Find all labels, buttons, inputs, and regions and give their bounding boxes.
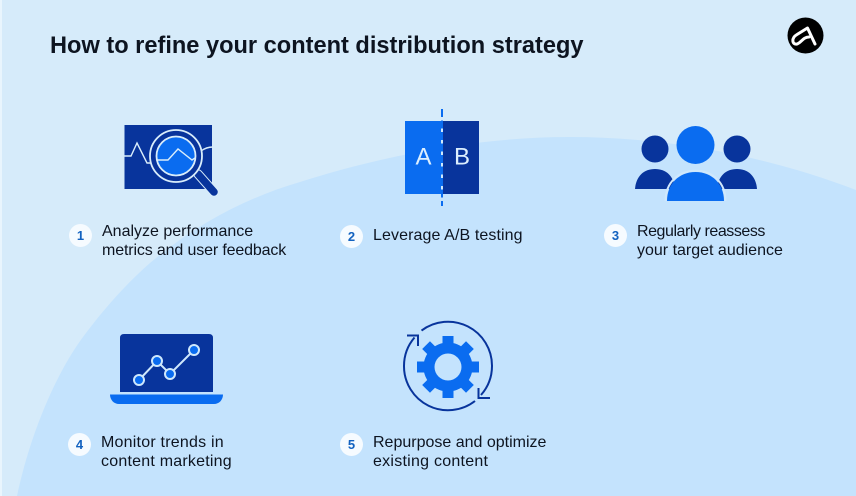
label 3: Regularly reassess xyxy=(637,223,765,240)
number 5 xyxy=(340,433,363,456)
icon: A/B test panels: B xyxy=(454,144,470,170)
icon: chart under magnifying glass xyxy=(124,125,218,196)
number 2 xyxy=(340,225,363,248)
label 5: Repurpose and optimize xyxy=(373,434,546,451)
label 3 xyxy=(637,223,783,259)
icon: A/B test panels xyxy=(405,109,479,206)
label 3: your target audience xyxy=(637,242,783,259)
label 1 xyxy=(102,223,286,259)
icon: brand logo xyxy=(788,18,824,54)
number 1: 1 xyxy=(77,228,84,243)
item 3 xyxy=(604,223,783,259)
item 1 xyxy=(69,223,286,259)
item 2 xyxy=(340,225,523,248)
number 3 xyxy=(604,224,627,247)
label 4: Monitor trends in xyxy=(101,434,224,451)
icon: audience group xyxy=(635,126,757,201)
label 4 xyxy=(101,434,232,470)
label 4: content marketing xyxy=(101,453,232,470)
item 5 xyxy=(340,433,546,470)
number 4 xyxy=(68,433,91,456)
label 5: existing content xyxy=(373,453,488,470)
label 5 xyxy=(373,434,546,470)
icon: laptop with line chart xyxy=(110,334,223,404)
number 5: 5 xyxy=(348,437,355,452)
icon: A/B test panels: A xyxy=(415,144,432,170)
item 4 xyxy=(68,433,232,470)
number 3: 3 xyxy=(612,228,619,243)
number 2: 2 xyxy=(348,229,355,244)
label 2: Leverage A/B testing xyxy=(373,227,523,244)
number 1 xyxy=(69,224,92,247)
icon: gear with cycle arrows xyxy=(403,320,493,412)
title: How to refine your content distribution strategy xyxy=(50,33,584,59)
label 1: metrics and user feedback xyxy=(102,242,286,259)
number 4: 4 xyxy=(76,437,83,452)
label 1: Analyze performance xyxy=(102,223,253,240)
